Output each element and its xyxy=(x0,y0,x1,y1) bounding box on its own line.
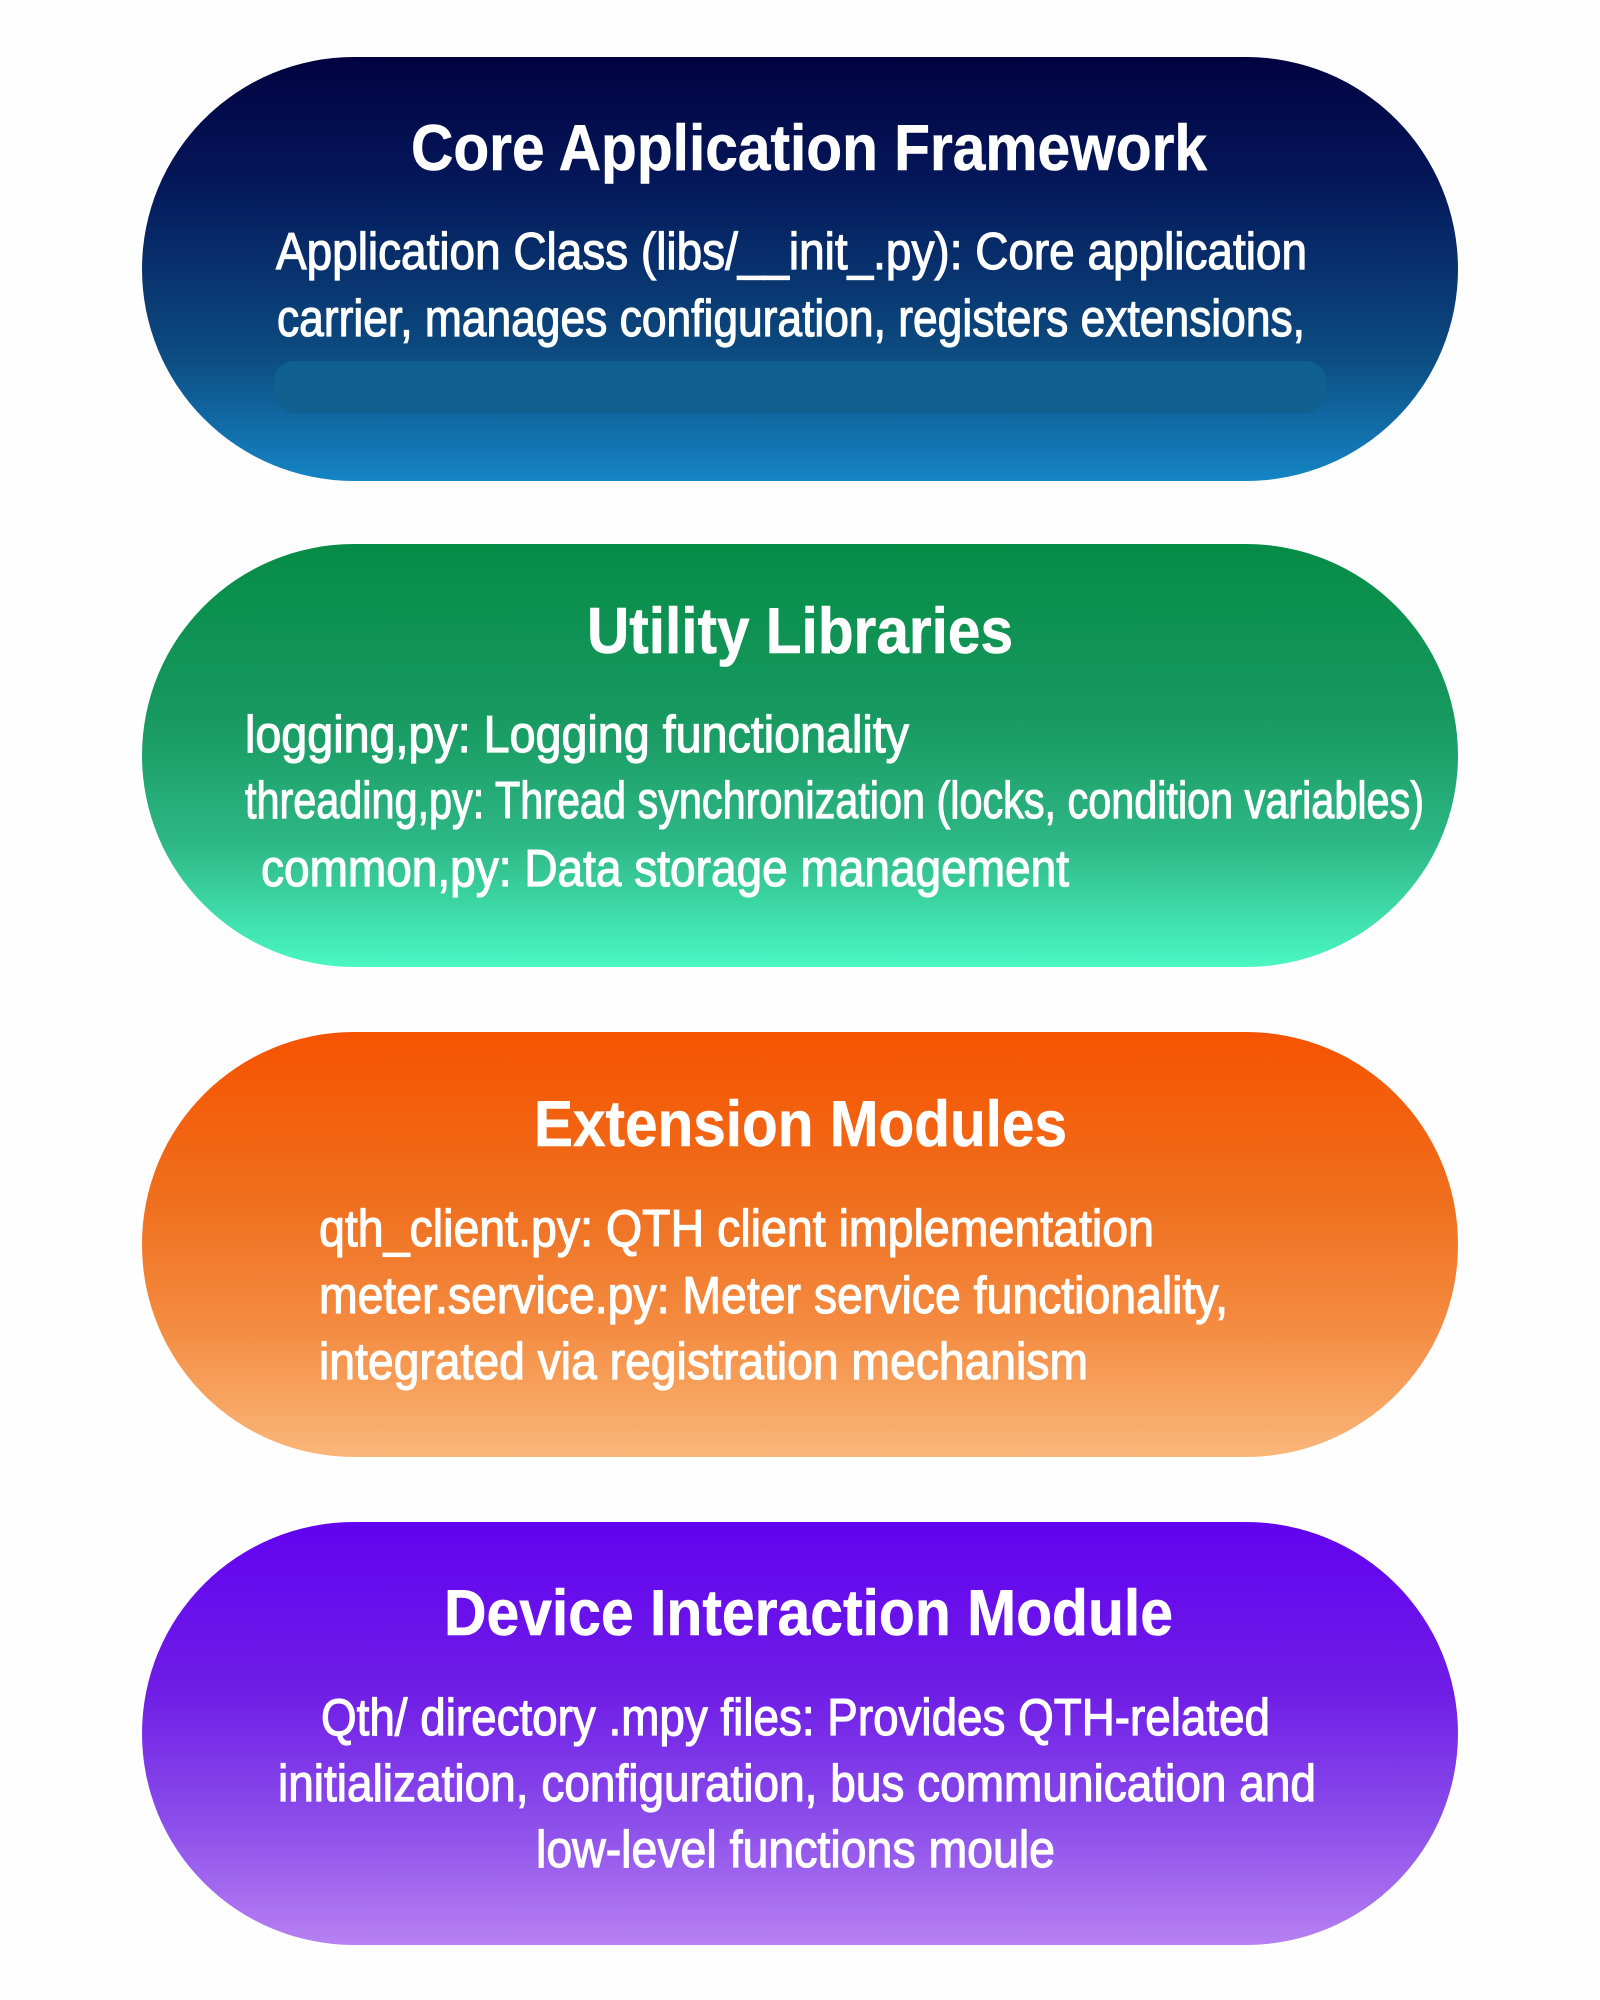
heading: Utility Libraries: Utility Libraries xyxy=(587,594,1013,667)
panel background: navy to blue pill xyxy=(142,57,1458,481)
panel: Extension Modules xyxy=(142,1032,1458,1457)
text block: device module description: initialization, configuration, bus communication and xyxy=(278,1755,1316,1813)
text block: device module description xyxy=(278,1689,1316,1879)
panel background: purple pill xyxy=(142,1522,1458,1945)
text block: device module description: low-level functions moule xyxy=(536,1821,1055,1879)
text block: extension file list: meter.service.py: Meter service functionality, xyxy=(319,1267,1228,1325)
panel: Core Application Framework xyxy=(142,57,1458,481)
blank highlighted bar xyxy=(274,361,1326,413)
panel: Utility Libraries xyxy=(142,544,1458,967)
text block: utility file list xyxy=(245,706,1424,898)
heading: Device Interaction Module: Device Interaction Module xyxy=(444,1576,1173,1649)
text block: application class description xyxy=(276,223,1307,348)
text block: utility file list: logging,py: Logging functionality xyxy=(245,706,909,764)
text block: extension file list: integrated via registration mechanism xyxy=(319,1333,1088,1391)
panel: Device Interaction Module xyxy=(142,1522,1458,1945)
heading: Extension Modules: Extension Modules xyxy=(534,1087,1067,1160)
heading: Core Application Framework: Core Application Framework xyxy=(411,111,1208,184)
text block: application class description: carrier, manages configuration, registers extensions, xyxy=(277,290,1305,348)
text block: extension file list xyxy=(319,1200,1228,1391)
text block: application class description: Application Class (libs/__init_.py): Core application xyxy=(276,223,1307,281)
text block: utility file list: common,py: Data storage management xyxy=(261,840,1069,898)
panel background: orange pill xyxy=(142,1032,1458,1457)
text block: device module description: Qth/ directory .mpy files: Provides QTH-related xyxy=(321,1689,1270,1747)
panel background: green pill xyxy=(142,544,1458,967)
text block: extension file list: qth_client.py: QTH client implementation xyxy=(319,1200,1154,1258)
